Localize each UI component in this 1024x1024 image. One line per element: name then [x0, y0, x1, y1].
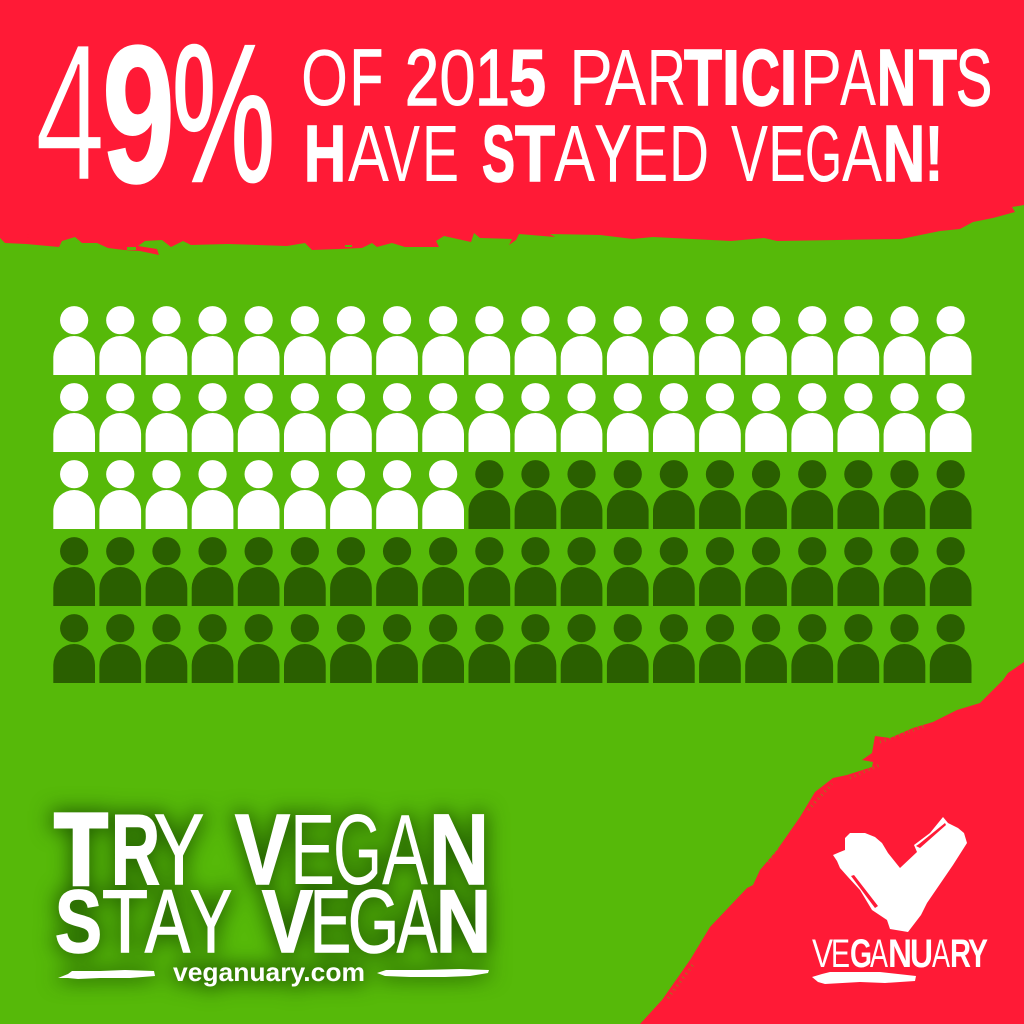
slogan line 2: stay vegan: Y [190, 871, 232, 971]
line 2: have stayed vegan!: A [842, 109, 882, 198]
icon: brushed heart [833, 817, 967, 932]
line 1: of 2015 participants: N [877, 33, 916, 122]
big figure 49%: 9 [102, 5, 175, 224]
dark green figures: did not stay vegan [53, 460, 972, 683]
slogan line 1: try vegan: G [333, 794, 382, 906]
slogan line 1: try vegan: Y [154, 794, 204, 906]
line 2: have stayed vegan!: N [883, 109, 925, 198]
red brush banner top [0, 0, 1024, 255]
line 1: of 2015 participants: 0 [439, 33, 476, 122]
line 1: of 2015 participants: P [800, 33, 842, 122]
slogan line 2: stay vegan: E [310, 871, 351, 971]
line 2: have stayed vegan!: D [669, 109, 709, 198]
line 2: have stayed vegan!: A [348, 109, 389, 198]
headline [35, 3, 992, 224]
line 1: of 2015 participants: R [647, 33, 686, 122]
line 2: have stayed vegan!: V [731, 109, 768, 198]
line 2: have stayed vegan!: H [304, 109, 346, 198]
slogan line 2: stay vegan: S [55, 871, 102, 971]
line 2: have stayed vegan!: Y [595, 109, 631, 198]
line 1: of 2015 participants: 1 [475, 33, 510, 122]
wordmark: N [888, 932, 912, 976]
big figure 49%: 4 [35, 3, 105, 222]
slogan line 1: try vegan: R [111, 794, 160, 906]
line 2: have stayed vegan!: A [554, 109, 595, 198]
line 1: of 2015 participants: T [919, 33, 957, 122]
slogan line 1: try vegan: E [290, 794, 335, 906]
slogan line 2: stay vegan: N [436, 871, 491, 971]
line 2: have stayed vegan!: ! [924, 109, 944, 198]
wordmark: R [950, 932, 971, 976]
line 2: have stayed vegan!: E [768, 109, 806, 198]
wordmark: A [932, 932, 950, 976]
veganuary logo [812, 817, 988, 984]
line 1: of 2015 participants: A [605, 33, 646, 122]
wordmark brush underline [812, 972, 916, 984]
line 1: of 2015 participants: O [301, 33, 348, 122]
wordmark: A [870, 932, 888, 976]
wordmark [812, 932, 988, 976]
slogan line 1: try vegan [55, 794, 489, 906]
line 1: of 2015 participants: F [350, 33, 383, 122]
line 1: of 2015 participants: S [956, 33, 992, 122]
line 2: have stayed vegan!: T [515, 109, 555, 198]
big figure 49% [35, 3, 275, 224]
wordmark: Y [968, 932, 988, 976]
slogan line 1: try vegan: N [429, 794, 489, 906]
slogan line 2: stay vegan: G [348, 871, 399, 971]
right brush stroke [377, 969, 489, 977]
red brush corner bottom right [640, 662, 1024, 1024]
line 1: of 2015 participants: I [720, 33, 742, 122]
pictogram: 100 people, 49 white [53, 306, 972, 683]
wordmark: G [850, 932, 872, 976]
left brush stroke [58, 970, 155, 979]
slogan line 2: stay vegan [55, 871, 491, 971]
slogan line 1: try vegan: T [55, 794, 107, 906]
line 2: have stayed vegan!: E [632, 109, 668, 198]
line 2: have stayed vegan!: G [805, 109, 842, 198]
slogan line 1: try vegan: V [235, 794, 290, 906]
website url: veganuary.com [173, 957, 365, 987]
line 1: of 2015 participants: 2 [405, 33, 439, 122]
big figure 49%: % [172, 4, 275, 223]
line 2: have stayed vegan!: S [482, 109, 515, 198]
line 1: of 2015 participants: I [778, 33, 798, 122]
line 2: have stayed vegan!: V [384, 109, 420, 198]
line 1: of 2015 participants: C [741, 33, 780, 122]
wordmark: U [910, 932, 933, 976]
slogan block with dark glow [55, 794, 491, 987]
line 1: of 2015 participants: 5 [509, 33, 546, 122]
slogan line 2: stay vegan: A [145, 871, 190, 971]
slogan line 2: stay vegan: V [262, 871, 313, 971]
wordmark: V [812, 932, 833, 976]
line 1: of 2015 participants: A [840, 33, 876, 122]
white figures: stayed vegan [53, 306, 972, 529]
line 1: of 2015 participants [301, 33, 992, 122]
slogan line 1: try vegan: A [382, 794, 428, 906]
slogan line 2: stay vegan: T [102, 871, 148, 971]
line 1: of 2015 participants: T [684, 33, 722, 122]
slogan line 2: stay vegan: A [397, 871, 437, 971]
line 1: of 2015 participants: P [569, 33, 613, 122]
line 2: have stayed vegan! [304, 109, 944, 198]
wordmark: E [831, 932, 850, 976]
line 2: have stayed vegan!: E [422, 109, 459, 198]
